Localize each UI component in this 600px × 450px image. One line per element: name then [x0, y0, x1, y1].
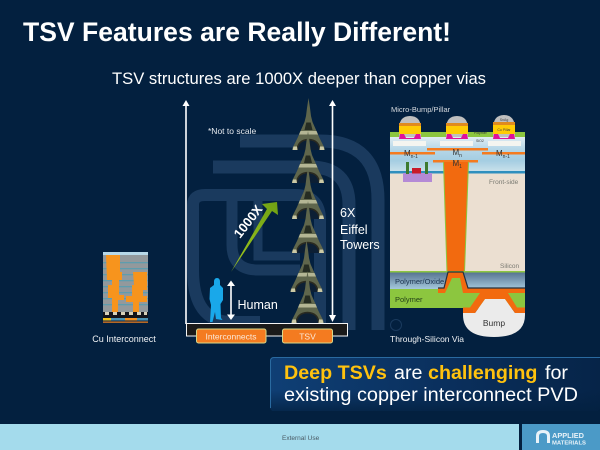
label: Bump: Bump: [483, 318, 505, 328]
bump right: Cu Pillar: [497, 128, 511, 132]
icon: human silhouette: [210, 278, 223, 322]
dielectric stack: [390, 136, 525, 171]
metal labels: M: [404, 149, 411, 158]
watermark logo: [193, 141, 378, 330]
callout: Deep TSVs: [284, 362, 387, 384]
bump right: [493, 115, 515, 139]
label: Silicon: Silicon: [500, 263, 520, 270]
green top edge: [390, 271, 525, 272]
TSV cross-section diagram: [390, 105, 525, 337]
footer logo panel: [522, 424, 600, 450]
footer bar: [0, 424, 519, 450]
label: 6X Eiffel Towers: Eiffel: [340, 223, 368, 237]
metal labels: 1: [459, 164, 462, 170]
label: 6X Eiffel Towers: [340, 206, 380, 252]
tower 6: [292, 271, 324, 323]
label: Cu Interconnect: Cu Interconnect: [92, 334, 156, 344]
bump left: [399, 116, 421, 139]
small labels: [474, 131, 488, 143]
metal labels: n: [459, 153, 462, 159]
button: TSV: [282, 329, 332, 343]
metal labels: [404, 148, 510, 170]
bump right: SnAg: [500, 118, 508, 122]
left scale arrow: [182, 100, 190, 324]
blue barrier line: [390, 171, 525, 174]
via: orange TSV with green liner: [443, 162, 469, 272]
callout: existing copper interconnect PVD: [284, 384, 578, 406]
callout: challenging: [428, 362, 537, 384]
tower 4: [292, 201, 324, 253]
small labels: Polymer: [474, 131, 488, 135]
callout: for: [545, 362, 568, 384]
polymer oxide layer: [390, 272, 525, 290]
bump middle: [446, 116, 468, 139]
metal labels: M: [452, 159, 459, 168]
metal layer bars: [390, 148, 525, 162]
tower 2: [292, 131, 324, 183]
label: Human: Human: [238, 298, 278, 312]
polymer layer: [390, 289, 525, 308]
metal labels: n-1: [411, 154, 418, 160]
Cu interconnect diagram: [103, 252, 148, 323]
label: Micro-Bump/Pillar: Micro-Bump/Pillar: [391, 105, 451, 114]
metal labels: n-1: [503, 154, 510, 160]
title: TSV Features are Really Different!: [23, 17, 451, 47]
footer logo panel: APPLIED: [552, 433, 584, 440]
button: TSV: TSV: [299, 332, 316, 342]
callout: [270, 357, 600, 411]
bump bottom: [463, 299, 525, 337]
human height arrow: [227, 280, 235, 320]
silicon layer: [390, 173, 525, 272]
base bar: [186, 324, 348, 336]
button: Interconnects: [196, 329, 266, 343]
footer bar: External Use: [282, 435, 320, 442]
small labels: SiO2: [476, 139, 484, 143]
label: Front-side: Front-side: [489, 179, 519, 186]
subtitle: TSV structures are 1000X deeper than copper vias: [112, 70, 486, 88]
green passivation: [390, 132, 525, 137]
metal labels: M: [496, 149, 503, 158]
orange redistribution layer: [438, 272, 525, 313]
label: Polymer: Polymer: [395, 295, 423, 304]
transistor: [403, 162, 432, 182]
label: 6X Eiffel Towers: Towers: [340, 238, 380, 252]
label: 6X Eiffel Towers: 6X: [340, 206, 356, 220]
white pads: [393, 141, 521, 146]
label: Through-Silicon Via: Through-Silicon Via: [390, 334, 464, 344]
label: Polymer/Oxide: Polymer/Oxide: [395, 277, 444, 286]
tower 3: [292, 167, 324, 219]
registered mark: [390, 320, 402, 330]
tower 5: [290, 240, 322, 292]
right scale arrow: [329, 100, 336, 322]
footer logo panel: MATERIALS: [552, 440, 586, 446]
button: Interconnects: Interconnects: [205, 332, 257, 342]
label: 1000X: 1000X: [231, 202, 266, 241]
tower 1: [292, 98, 324, 150]
dark barrier line: [438, 272, 525, 288]
callout: are: [394, 362, 423, 384]
growth arrow: [231, 202, 278, 272]
metal labels: M: [452, 148, 459, 157]
note: not to scale: *Not to scale: [208, 126, 256, 136]
green core inside redistribution step: [445, 278, 463, 293]
